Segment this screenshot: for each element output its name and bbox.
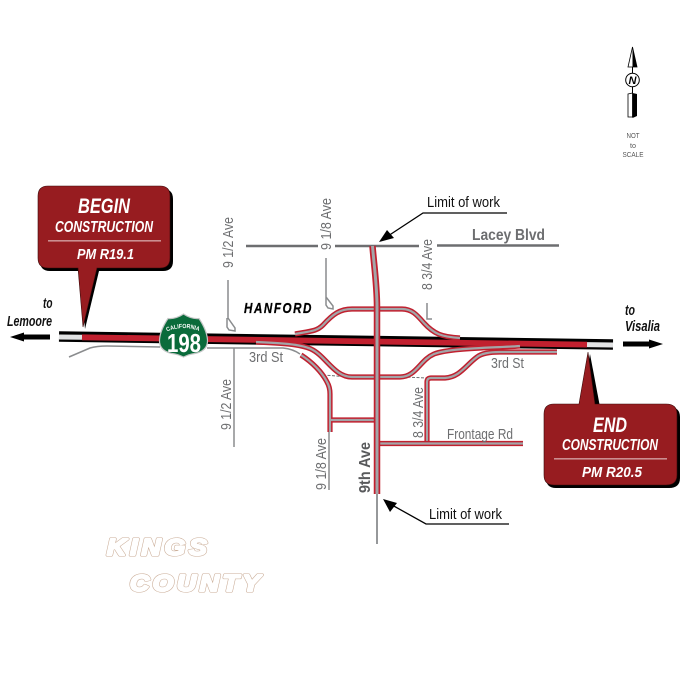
label: Kings County: KINGS: [107, 536, 211, 561]
callout: end construction: [544, 352, 680, 488]
callout: begin construction: PM R19.1: [77, 246, 134, 263]
label: 8 3/4 Ave south: 8 3/4 Ave: [411, 387, 427, 438]
highway 198: [59, 336, 613, 345]
label: 9 1/2 Ave south: 9 1/2 Ave: [219, 379, 235, 430]
callout: begin construction: [38, 186, 173, 329]
label: 9th Ave: 9th Ave: [357, 442, 374, 493]
label: 9 1/2 Ave north: 9 1/2 Ave: [221, 217, 237, 268]
dashed connectors: [323, 375, 428, 378]
arrow: west: [10, 332, 50, 342]
label: 8 3/4 Ave north: 8 3/4 Ave: [420, 239, 436, 290]
road: 8 3/4 Ave north stub: [427, 303, 432, 319]
3rd St west and 9 1/8 Ave: [301, 355, 330, 432]
road: Lacey Blvd: [246, 244, 559, 247]
label: 9 1/8 Ave south: 9 1/8 Ave: [314, 438, 330, 490]
road: 9 1/2 Ave south: [233, 348, 235, 447]
label: Kings County: COUNTY: [130, 572, 264, 597]
label: 9 1/8 Ave north: 9 1/8 Ave: [319, 198, 335, 250]
road: 9th Ave south extension: [376, 494, 378, 544]
road: 9 1/8 Ave south thin: [328, 432, 330, 490]
callout: limit of work north: [379, 194, 507, 242]
label: Frontage Rd: Frontage Rd: [447, 427, 513, 443]
route shield 198: 198: [167, 328, 201, 358]
route shield 198: [158, 313, 208, 358]
destination: to Visalia: [625, 302, 660, 335]
connector to 9th Ave: [331, 417, 374, 423]
3rd St east and 8 3/4 Ave: [427, 352, 557, 443]
road: 9 1/2 Ave north stub: [227, 280, 235, 331]
label: Lacey Blvd: Lacey Blvd: [472, 227, 545, 244]
north loop ramps: [295, 309, 460, 338]
arrow: east: [623, 340, 663, 348]
destination: to Lemoore: [7, 295, 52, 330]
label: 3rd St east: 3rd St: [491, 356, 524, 372]
route shield 198: CALIFORNIA: [166, 324, 199, 331]
note: not to scale: to: [630, 141, 636, 150]
note: not to scale: NOT: [626, 131, 640, 140]
south loop ramp: [256, 342, 520, 377]
callout: end construction: CONSTRUCTION: [562, 437, 659, 454]
road: 3rd St west thin: [69, 346, 300, 357]
note: not to scale: SCALE: [622, 150, 644, 159]
callout: end construction: END: [593, 414, 627, 437]
destination: to Visalia: to: [625, 302, 635, 319]
9th Ave: [372, 246, 377, 494]
construction roads: [256, 246, 557, 494]
label: Kings County: [107, 536, 264, 597]
note: not to scale: [622, 131, 644, 159]
label: HANFORD: HANFORD: [244, 300, 313, 317]
destination: to Visalia: Visalia: [625, 318, 660, 335]
north arrow: [626, 47, 639, 118]
label: Kings County: COUNTY: [130, 572, 264, 597]
Frontage Rd: [379, 441, 523, 446]
callout: begin construction: BEGIN: [78, 195, 131, 218]
callout: limit of work north: Limit of work: [427, 194, 500, 211]
label: Kings County: KINGS: [107, 536, 211, 561]
north arrow: N: [629, 75, 638, 87]
road: 9 1/8 Ave north stub: [326, 258, 333, 309]
callout: end construction: PM R20.5: [582, 464, 643, 481]
label: 3rd St west: 3rd St: [249, 350, 283, 366]
destination: to Lemoore: Lemoore: [7, 313, 52, 330]
callout: limit of work south: Limit of work: [429, 506, 502, 523]
destination: to Lemoore: to: [43, 295, 52, 312]
callout: limit of work south: [383, 499, 509, 524]
callout: begin construction: CONSTRUCTION: [55, 219, 154, 236]
